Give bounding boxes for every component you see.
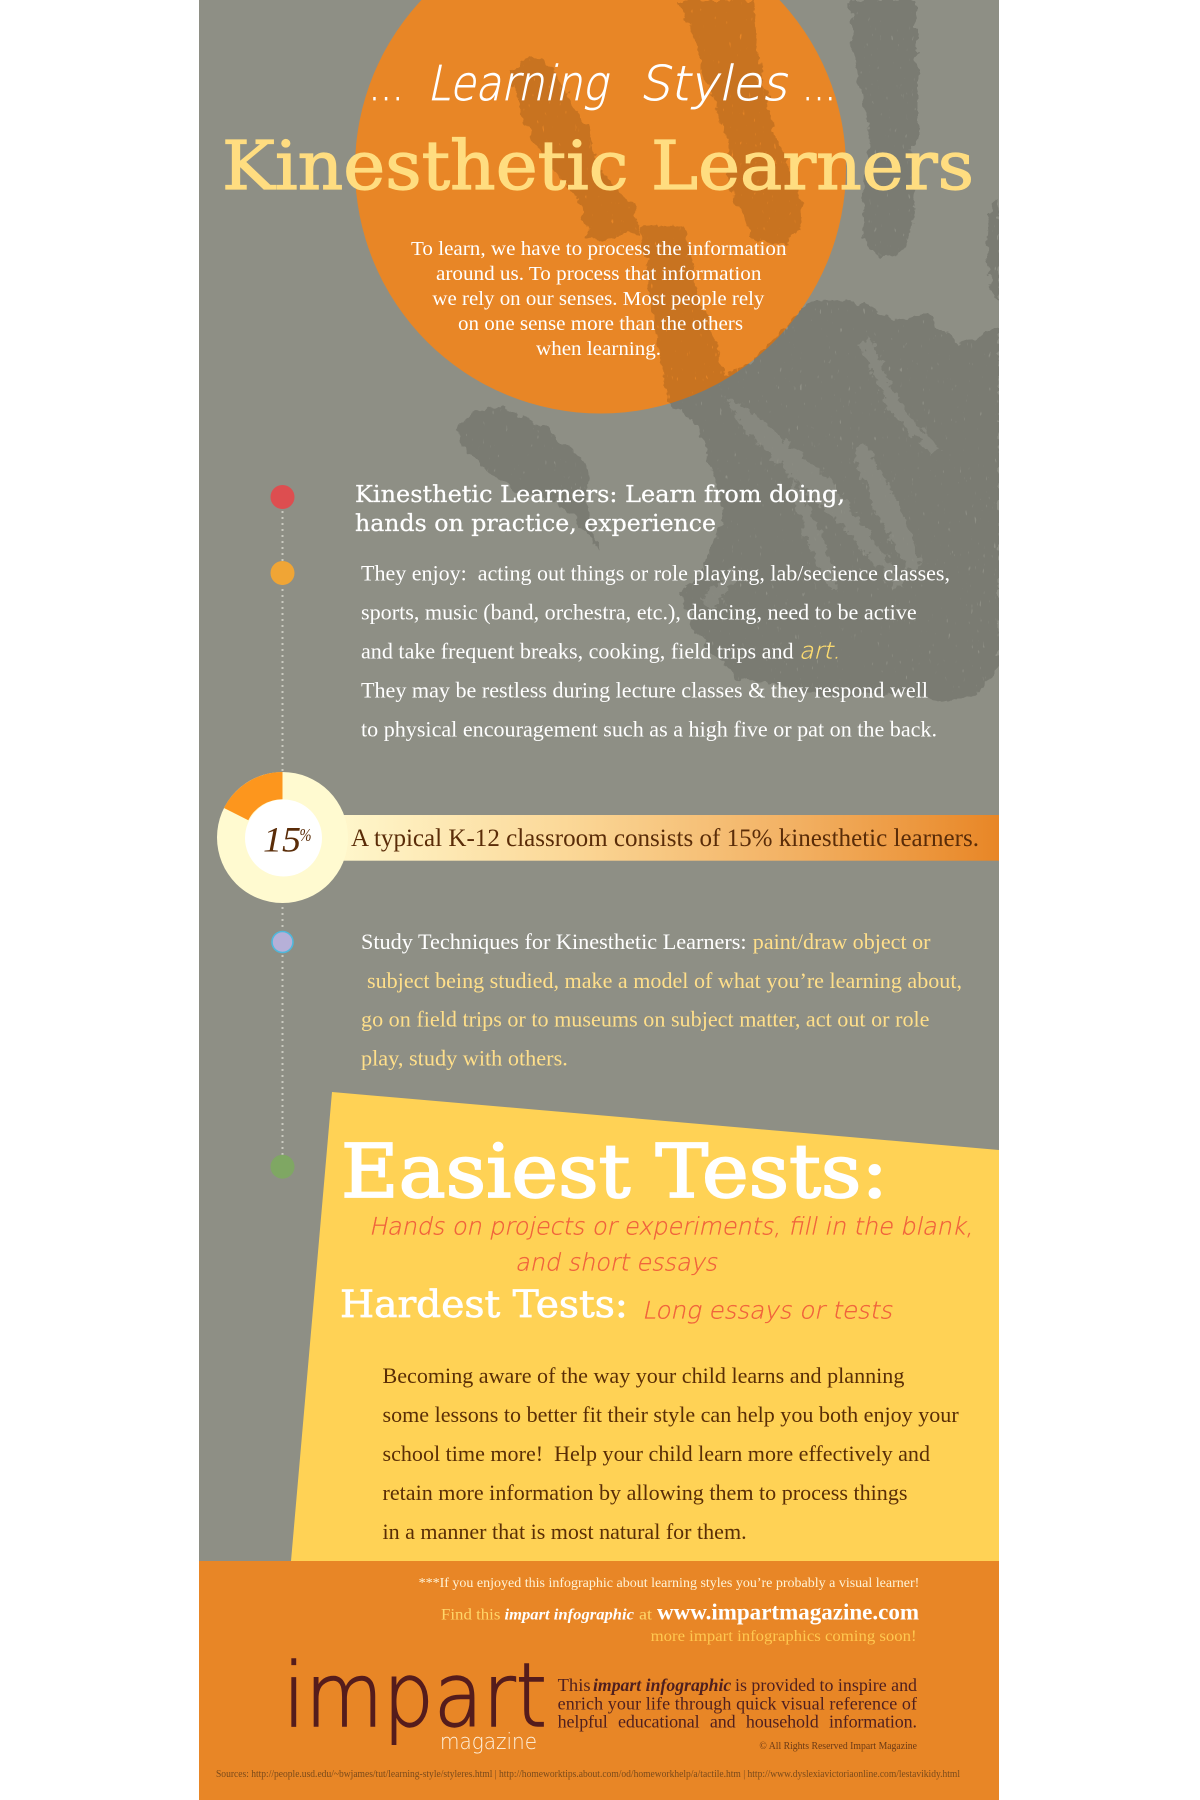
text block: study techniques: paint/draw object or: [753, 929, 931, 954]
title: Learning Styles: [369, 56, 836, 112]
text block: they enjoy: art.: [798, 637, 845, 665]
text block: study techniques: go on field trips or to museums on subject matter, act out or role: [361, 1007, 930, 1032]
gradient band with statistic: A typical K-12 classroom consists of 15% kinesthetic learners.: [351, 823, 979, 852]
intro text block: [411, 238, 786, 360]
text block: they enjoy: and take frequent breaks, cooking, field trips and: [361, 639, 794, 664]
easiest tests detail: Hands on projects or experiments, fill in the blank,: [368, 1212, 978, 1240]
logo: impart magazine: magazine: [440, 1730, 537, 1755]
closing text block: school time more! Help your child learn more effectively and: [382, 1441, 930, 1466]
footer coming soon: more impart infographics coming soon!: [651, 1628, 917, 1645]
text block: they enjoy: They enjoy: acting out things or role playing, lab/secience classes,: [361, 561, 950, 586]
footer website line: [441, 1599, 919, 1624]
easiest tests detail: and short essays: [514, 1248, 722, 1276]
text block: they enjoy: to physical encouragement such as a high five or pat on the back.: [361, 717, 937, 742]
closing text block: in a manner that is most natural for them.: [382, 1519, 747, 1544]
footer about text: is provided to inspire and: [735, 1675, 917, 1695]
footer about text: impart infographic: [593, 1675, 731, 1695]
text block: study techniques: [361, 929, 962, 1071]
closing text block: retain more information by allowing them to process things: [382, 1480, 908, 1505]
heading: hardest tests: Hardest Tests:: [340, 1282, 628, 1326]
footer about text: [558, 1675, 917, 1732]
easiest tests detail: [368, 1212, 978, 1276]
copyright: © All Rights Reserved Impart Magazine: [759, 1740, 917, 1752]
footer note: ***If you enjoyed this infographic about learning styles you’re probably a visual learner!: [419, 1575, 919, 1590]
panel: orange footer: [199, 1561, 999, 1800]
gradient band with statistic: [330, 815, 999, 861]
timeline dotted line: [282, 505, 284, 1160]
text block: study techniques: subject being studied, make a model of what you’re learning about,: [367, 968, 962, 993]
donut chart: 15 percent: [217, 772, 348, 903]
title: Learning Styles: ...: [369, 60, 404, 111]
donut chart: 15 percent: 15: [263, 820, 301, 860]
title: Learning Styles: Styles: [636, 56, 796, 112]
footer website line: at: [639, 1606, 653, 1623]
intro text block: To learn, we have to process the information: [411, 238, 786, 260]
title: Learning Styles: ...: [802, 60, 836, 111]
donut chart: 15 percent: %: [300, 825, 312, 845]
timeline dot: lavender: [272, 932, 293, 952]
intro text block: on one sense more than the others: [458, 313, 743, 335]
text block: they enjoy: [361, 561, 950, 742]
handprint texture: [457, 0, 999, 703]
intro text block: around us. To process that information: [436, 263, 761, 285]
heading: learn from doing: [355, 482, 845, 537]
footer website line: Find this: [441, 1606, 500, 1623]
footer website line: impart infographic: [504, 1606, 634, 1623]
timeline dot: red: [270, 485, 294, 509]
intro text block: when learning.: [536, 338, 661, 360]
heading: learn from doing: hands on practice, experience: [355, 511, 716, 537]
closing text block: [382, 1363, 959, 1544]
footer website line: www.impartmagazine.com: [657, 1599, 919, 1624]
text block: study techniques: play, study with others.: [361, 1046, 568, 1071]
timeline dot: green: [270, 1155, 294, 1179]
hardest tests detail: Long essays or tests: [641, 1296, 897, 1324]
heading: easiest tests: Easiest Tests:: [341, 1129, 888, 1215]
panel: grey background: [199, 0, 999, 1800]
intro text block: we rely on our senses. Most people rely: [432, 288, 765, 310]
footer about text: enrich your life through quick visual reference of: [558, 1693, 917, 1713]
orange header circle: [355, 0, 846, 414]
title: Kinesthetic Learners: Kinesthetic Learners: [222, 127, 974, 205]
sources: Sources: http://people.usd.edu/~bwjames/tut/learning-style/styleres.html | http://homeworktips.about.com/od/homeworkhelp/a/tactile.htm | http://www.dyslexiavictoriaonline.com/lestavikidy.html: [216, 1769, 960, 1780]
timeline dot: orange: [270, 561, 294, 585]
text block: they enjoy: They may be restless during lecture classes & they respond well: [361, 678, 928, 703]
text block: they enjoy: sports, music (band, orchestra, etc.), dancing, need to be active: [361, 600, 917, 625]
footer about text: This: [558, 1675, 591, 1695]
closing text block: Becoming aware of the way your child learns and planning: [382, 1363, 904, 1388]
yellow tests panel: [291, 1092, 999, 1561]
text block: study techniques: Study Techniques for Kinesthetic Learners:: [361, 929, 747, 954]
closing text block: some lessons to better fit their style can help you both enjoy your: [382, 1402, 959, 1427]
logo: impart magazine: impart: [283, 1644, 547, 1747]
heading: learn from doing: Kinesthetic Learners: Learn from doing,: [355, 482, 845, 508]
footer about text: helpful educational and household information.: [558, 1712, 917, 1732]
title: Learning Styles: Learning: [424, 56, 616, 112]
